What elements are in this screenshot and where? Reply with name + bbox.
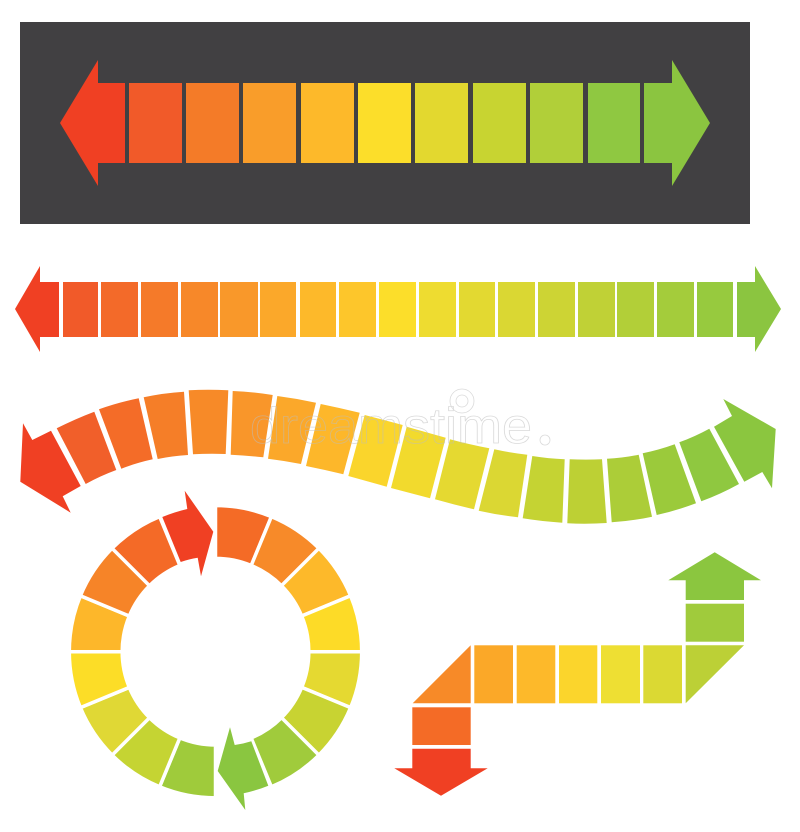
- stepped segments: [412, 604, 744, 745]
- watermark: dreamstime: [250, 398, 532, 454]
- scale segments: [63, 282, 733, 337]
- arrow: green right: [644, 60, 710, 186]
- ring segments: [69, 506, 362, 798]
- circular scale: [69, 491, 362, 810]
- straight scale on dark panel: [60, 60, 710, 186]
- arrow: red left: [15, 266, 59, 352]
- long straight scale: [15, 266, 781, 352]
- arrow: red left: [20, 423, 81, 513]
- arrow: green right: [714, 399, 776, 488]
- scale segments: [129, 83, 640, 163]
- arrow: red clockwise: [162, 491, 213, 576]
- arrow: red left: [60, 60, 125, 186]
- arrow: red down: [394, 749, 488, 796]
- arrow: green clockwise: [218, 727, 268, 810]
- stepped scale: [394, 552, 761, 796]
- arrow: green right: [737, 266, 781, 352]
- arrow: green up: [668, 552, 761, 600]
- wave segments: [57, 390, 739, 524]
- wavy scale: [20, 390, 776, 524]
- panel: dark background: [20, 22, 750, 224]
